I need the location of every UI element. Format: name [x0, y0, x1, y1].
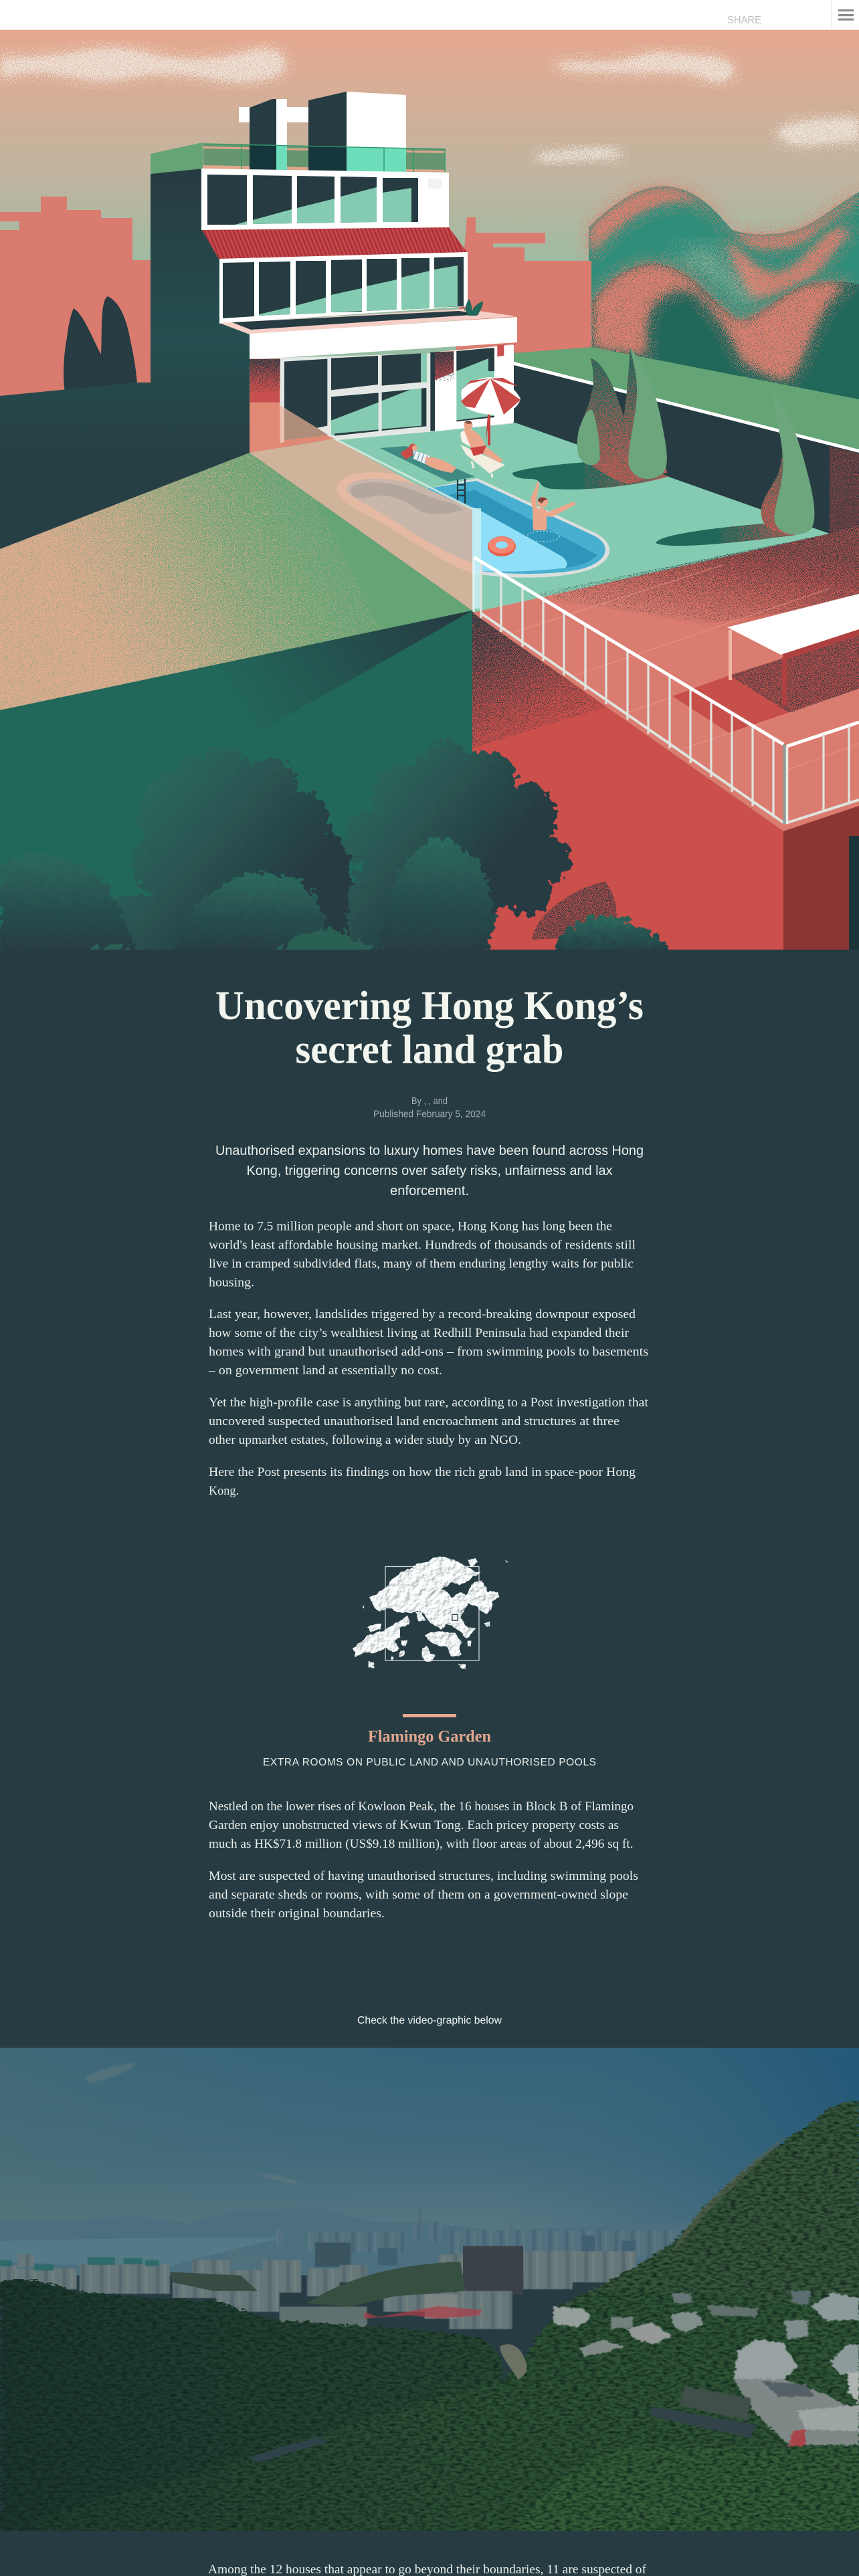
left forest hill: [0, 2279, 503, 2532]
intro paragraph 3: [209, 1396, 649, 1447]
mid city towers: [192, 2242, 636, 2296]
intro paragraph 3: uncovered suspected unauthorised land encroachment and structures at three: [209, 1414, 619, 1428]
section heading: Flamingo Garden: Flamingo Garden: [368, 1728, 491, 1745]
bushes: [0, 853, 137, 956]
standfirst: enforcement.: [390, 1183, 469, 1198]
mid hill: [307, 2262, 466, 2306]
title: Uncovering Hong Kong’s: [215, 984, 644, 1029]
section heading: Flamingo Garden: [263, 1714, 596, 1768]
clouds: [0, 47, 859, 163]
Flamingo Garden paragraph 1: Garden enjoy unobstructed views of Kwun Tong. Each pricey property costs as: [209, 1818, 619, 1832]
trees foreground: [0, 741, 674, 956]
terrace tree shadows: [512, 460, 796, 546]
hills: [589, 186, 859, 415]
dark twin towers: [463, 2246, 523, 2294]
landmass shapes: [353, 1557, 508, 1669]
harbour water: [0, 2238, 285, 2268]
intro paragraph 2: Last year, however, landslides triggered by a record-breaking downpour exposed: [209, 1307, 636, 1321]
Flamingo Garden paragraph 1: [209, 1800, 634, 1851]
ground floor with sliding doors: [250, 344, 514, 456]
low-rise blocks and red roofs: [280, 2288, 512, 2329]
intro paragraph 1: [209, 1220, 636, 1289]
photo: aerial view of Kowloon Peak: [0, 2048, 859, 2532]
intro paragraph 2: homes with grand but unauthorised add-ons – from swimming pools to basements: [209, 1345, 648, 1359]
house: [201, 92, 517, 456]
swimmer: [527, 481, 576, 542]
intro paragraph 3: Yet the high-profile case is anything but rare, according to a Post investigation that: [209, 1396, 649, 1410]
faint clouds: [85, 2062, 304, 2185]
distant mountains: [0, 2208, 690, 2276]
locator map of Hong Kong: [353, 1557, 508, 1669]
Flamingo Garden paragraph 2: Most are suspected of having unauthorised structures, including swimming pools: [209, 1869, 638, 1883]
standfirst: Kong, triggering concerns over safety risks, unfairness and lax: [246, 1163, 613, 1178]
cypress silhouettes: [64, 296, 137, 390]
large tree right: [343, 741, 571, 956]
deck: [472, 526, 859, 831]
large tree left: [114, 748, 368, 956]
sun lounger man: [460, 415, 505, 477]
hillside houses: [250, 2291, 859, 2462]
byline and date: [373, 1096, 486, 1119]
subheading: EXTRA ROOMS ON PUBLIC LAND AND UNAUTHORISED POOLS: [263, 1757, 596, 1768]
glass deck railing: [474, 557, 859, 824]
Flamingo Garden paragraph 2: [209, 1869, 638, 1921]
standfirst: Unauthorised expansions to luxury homes have been found across Hong: [215, 1143, 644, 1158]
mountain rock tint: [671, 2133, 789, 2253]
Flamingo Garden paragraph 1: Nestled on the lower rises of Kowloon Peak, the 16 houses in Block B of Flamingo: [209, 1800, 634, 1814]
intro paragraph 4: Kong.: [209, 1484, 239, 1498]
byline and date: By , , and: [411, 1096, 448, 1107]
towel and sunbathing woman: [380, 444, 475, 481]
right foreground forest: [27, 2289, 859, 2532]
intro paragraph 3: other upmarket estates, following a wider study by an NGO.: [209, 1433, 521, 1447]
intro paragraph 2: – on government land at essentially no cost.: [208, 1364, 442, 1378]
green slope lower left: [0, 611, 472, 953]
mint terrace: [335, 423, 830, 613]
background buildings left: [0, 197, 151, 401]
background buildings right: [455, 217, 591, 361]
deck table with shadow: [672, 594, 859, 733]
right mountain: [559, 2101, 859, 2321]
hero illustration: hillside house with pool: [0, 29, 859, 956]
Flamingo Garden paragraph 1: much as HK$71.8 million (US$9.18 million), with floor areas of about 2,496 sq ft.: [209, 1837, 633, 1851]
ground plane green to peach: [0, 453, 472, 710]
byline and date: Published February 5, 2024: [373, 1109, 486, 1119]
top floor with windows: [201, 169, 449, 230]
icon: hamburger menu: [838, 9, 854, 21]
rooftop glass railing: [203, 144, 445, 172]
share label: SHARE: [727, 15, 761, 26]
title: [215, 984, 644, 1073]
red corrugated awning: [202, 227, 467, 259]
planter balcony: [219, 299, 517, 360]
rooftop blocks: [239, 92, 406, 172]
far city skyline: [277, 2208, 679, 2272]
intro paragraph 1: Home to 7.5 million people and short on space, Hong Kong has long been the: [209, 1220, 612, 1233]
highlighted location marker: [452, 1614, 458, 1620]
intro paragraph 2: [208, 1307, 648, 1378]
accent bar: [403, 1714, 456, 1717]
intro paragraph 4: [209, 1465, 636, 1498]
umbrella: [461, 377, 520, 445]
intro paragraph 4: Here the Post presents its findings on how the rich grab land in space-poor Hong: [209, 1465, 636, 1479]
icon: swim ring: [488, 536, 516, 556]
middle floor with windows: [219, 252, 468, 324]
swimming pool: [428, 478, 609, 578]
sky: [0, 2048, 859, 2275]
video prompt: Check the video-graphic below: [357, 2015, 502, 2026]
dark ground and house side wall: [0, 142, 250, 431]
intro paragraph 2: how some of the city’s wealthiest living at Redhill Peninsula had expanded their: [209, 1326, 630, 1340]
green retaining wall: [513, 347, 859, 535]
hillside road: [500, 2344, 527, 2379]
top navigation bar: [0, 0, 859, 30]
cypress trees on terrace: [577, 348, 814, 534]
grain on ground-floor wall: [250, 352, 454, 393]
Flamingo Garden paragraph 2: and separate sheds or rooms, with some of them on a government-owned slope: [209, 1888, 628, 1902]
title: secret land grab: [296, 1027, 563, 1073]
map frame: [385, 1566, 479, 1660]
icon: pool ladder: [458, 479, 465, 504]
intro paragraph 1: world's least affordable housing market. Hundreds of thousands of residents still: [209, 1239, 636, 1252]
red retaining wall: [472, 611, 859, 953]
standfirst: [215, 1143, 644, 1198]
left residential towers: [0, 2254, 280, 2312]
foreground brighter forest: [515, 2445, 859, 2532]
translucent strip showing illegal extension: [250, 439, 609, 611]
intro paragraph 1: housing.: [209, 1276, 254, 1289]
icon: plant: [455, 299, 483, 316]
Flamingo Garden paragraph 2: outside their original boundaries.: [209, 1907, 385, 1921]
grainy bush on red wall: [532, 881, 617, 940]
sky: [0, 29, 859, 431]
intro paragraph 1: live in cramped subdivided flats, many of them enduring lengthy waits for public: [209, 1257, 634, 1271]
